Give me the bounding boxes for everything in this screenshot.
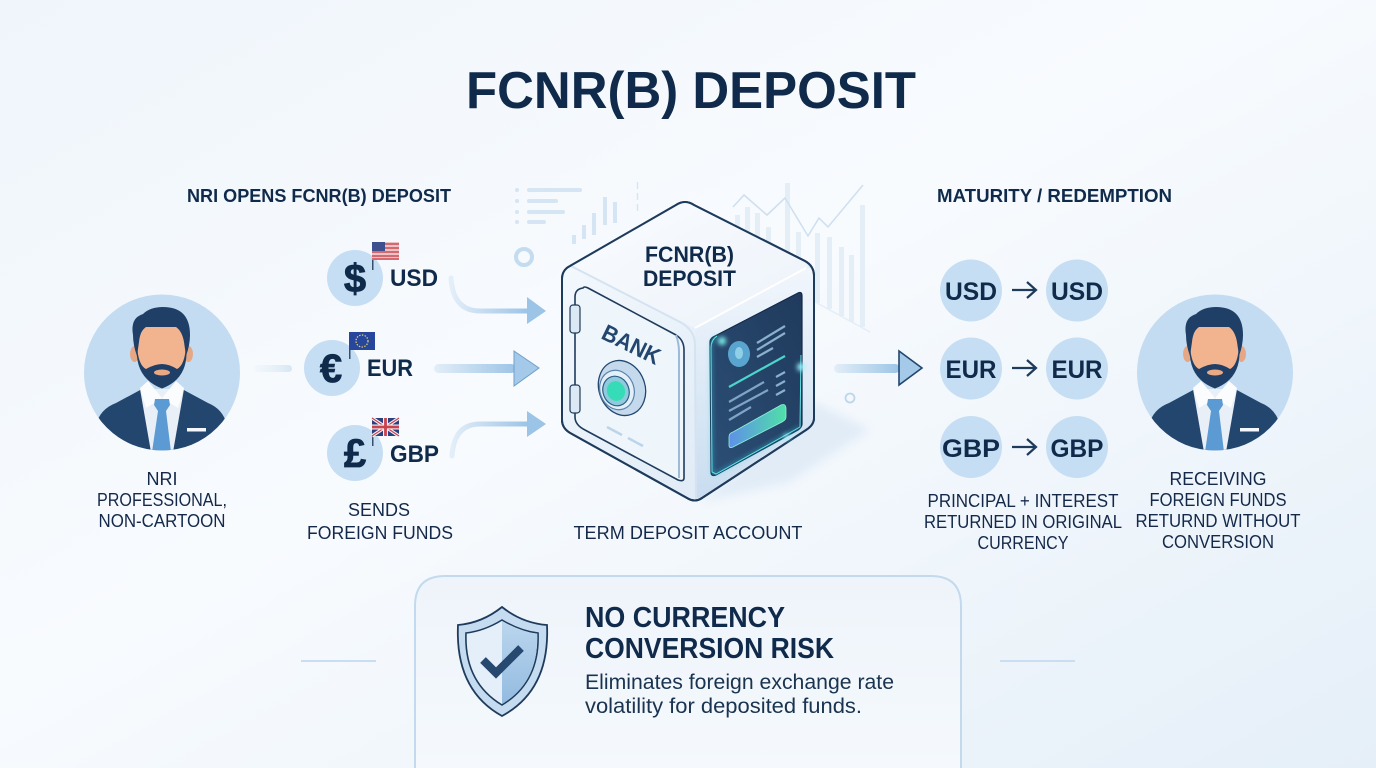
row: GBP to GBP	[940, 416, 1108, 478]
text: principal + interest: CURRENCY	[978, 533, 1068, 553]
arrow: EUR to safe	[434, 351, 539, 386]
text: sends foreign funds: FOREIGN FUNDS	[307, 523, 453, 543]
currency: GBP	[327, 418, 439, 481]
currency: GBP: £	[344, 432, 366, 476]
currency: EUR: EUR	[367, 355, 413, 382]
text: receiving caption: CONVERSION	[1162, 532, 1274, 552]
icon: receiving person	[1137, 294, 1293, 455]
row: EUR to EUR: EUR	[1052, 356, 1102, 384]
panel body: Eliminates foreign exchange rate	[585, 671, 894, 694]
row: EUR to EUR	[940, 338, 1108, 400]
heading: NRI opens deposit: NRI OPENS FCNR(B) DEPOSIT	[187, 186, 451, 206]
currency: USD: USD	[390, 265, 438, 292]
row: USD to USD: USD	[1051, 278, 1103, 306]
row: USD to USD: USD	[945, 278, 997, 306]
text: NRI caption	[97, 469, 227, 531]
digital screen	[710, 292, 802, 476]
row: GBP to GBP: GBP	[1050, 435, 1104, 463]
currency: GBP: GBP	[390, 441, 439, 468]
text: NRI caption: NRI	[146, 469, 178, 489]
arrow: GBP to safe	[452, 411, 546, 456]
BANK label: BANK	[598, 319, 665, 370]
text: sends foreign funds	[307, 500, 453, 543]
currency: USD: $	[344, 257, 366, 301]
dial	[591, 354, 653, 422]
row: USD to USD	[940, 260, 1108, 322]
safe door	[575, 287, 684, 481]
text: sends foreign funds: SENDS	[348, 500, 410, 520]
text: NRI caption: PROFESSIONAL,	[97, 490, 227, 510]
panel heading: NO CURRENCY	[585, 602, 785, 634]
decorative: small ring	[846, 394, 854, 402]
panel: no currency conversion risk	[415, 576, 961, 768]
row: GBP to GBP: GBP	[942, 435, 1000, 463]
safe: FCNR(B) vault	[562, 202, 814, 500]
panel: no currency conversion risk: CONVERSION RISK	[585, 633, 834, 665]
title: FCNR(B) DEPOSIT	[466, 62, 916, 120]
connector: NRI to EUR	[254, 365, 292, 372]
icon: NRI person	[84, 294, 240, 455]
text: principal + interest	[924, 491, 1122, 553]
arrow: USD to safe	[451, 278, 546, 324]
text: term deposit account: TERM DEPOSIT ACCOUNT	[574, 523, 802, 543]
text: receiving caption: RECEIVING	[1170, 469, 1266, 489]
text: principal + interest: PRINCIPAL + INTEREST	[928, 491, 1119, 511]
icon: shield	[458, 607, 547, 716]
currency: USD	[327, 242, 438, 306]
safe label: FCNR(B)	[645, 242, 734, 267]
text: receiving caption: RETURND WITHOUT	[1136, 511, 1300, 531]
decorative: ring	[516, 249, 532, 265]
decorative: background chart	[733, 183, 870, 332]
currency: EUR	[304, 332, 413, 396]
text: receiving caption	[1136, 469, 1300, 552]
arrow: safe to maturity	[834, 351, 922, 385]
side lines	[301, 660, 1075, 662]
panel: no currency conversion risk: volatility for deposited funds.	[585, 695, 862, 718]
safe: FCNR(B) vault: DEPOSIT	[643, 266, 737, 291]
text: principal + interest: RETURNED IN ORIGINAL	[924, 512, 1122, 532]
door hinges	[570, 305, 580, 333]
right face	[695, 268, 813, 498]
text: NRI caption: NON-CARTOON	[98, 511, 226, 531]
currency: EUR: €	[320, 347, 342, 391]
top face	[571, 203, 808, 328]
row: EUR to EUR: EUR	[946, 356, 996, 384]
text: receiving caption: FOREIGN FUNDS	[1150, 490, 1286, 510]
decorative: list chart	[515, 182, 638, 244]
heading: maturity: MATURITY / REDEMPTION	[937, 186, 1172, 206]
safe shadow	[700, 402, 870, 503]
